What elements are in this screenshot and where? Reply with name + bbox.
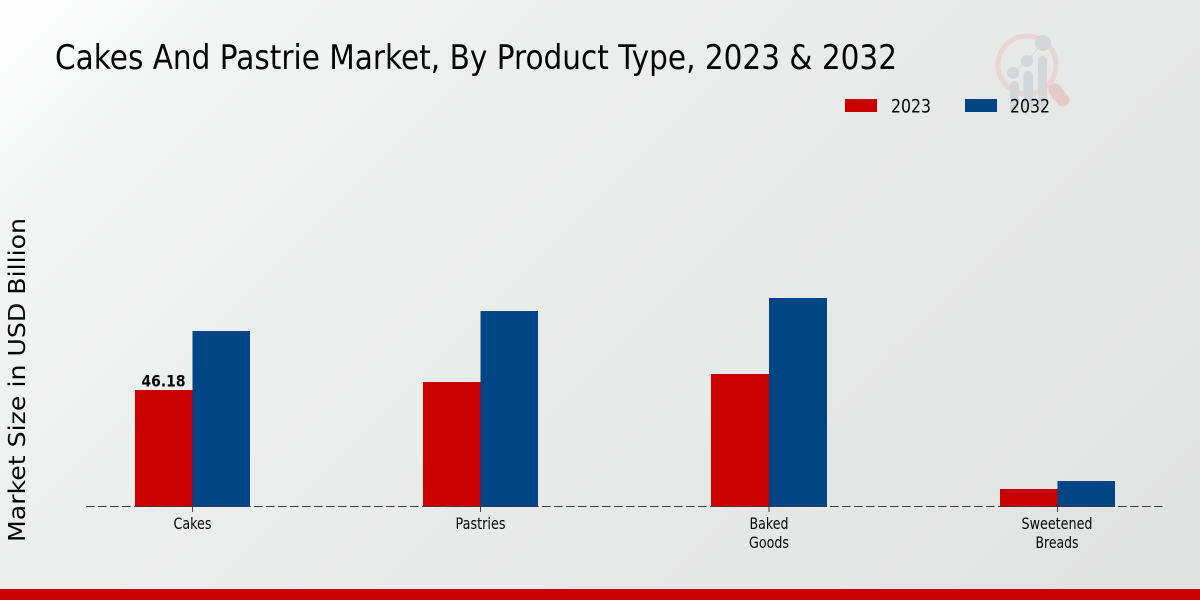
bar chart — [86, 298, 1164, 552]
legend label: 2023: 2023 — [891, 96, 931, 118]
x-axis baseline — [86, 506, 1164, 508]
category label: Sweetened Breads: Sweetened — [1022, 514, 1092, 533]
category label: Baked Goods: Baked — [750, 514, 788, 533]
category label: Cakes: Cakes — [174, 514, 212, 533]
category label: Sweetened Breads: Breads — [1036, 533, 1078, 552]
title: Cakes And Pastrie Market, By Product Type, 2023 & 2032 — [55, 38, 897, 78]
legend swatch: 2023 — [845, 99, 877, 112]
legend — [845, 96, 1050, 118]
bars: Cakes — [135, 331, 250, 507]
bars: Pastries — [423, 311, 538, 507]
bars: Sweetened Breads — [1000, 481, 1115, 507]
data label: 46.18: 46.18 — [142, 372, 186, 390]
category label: Sweetened Breads — [1022, 514, 1092, 552]
icon: watermark logo — [998, 35, 1063, 111]
legend swatch: 2032 — [965, 99, 997, 112]
legend label: 2032: 2032 — [1010, 96, 1050, 118]
category label: Baked Goods: Goods — [749, 533, 789, 552]
footer bar — [0, 589, 1200, 600]
y-axis title: Market Size in USD Billion — [5, 218, 31, 542]
category label: Pastries: Pastries — [456, 514, 506, 533]
bars: Baked Goods — [711, 298, 827, 507]
category label: Baked Goods — [749, 514, 789, 552]
